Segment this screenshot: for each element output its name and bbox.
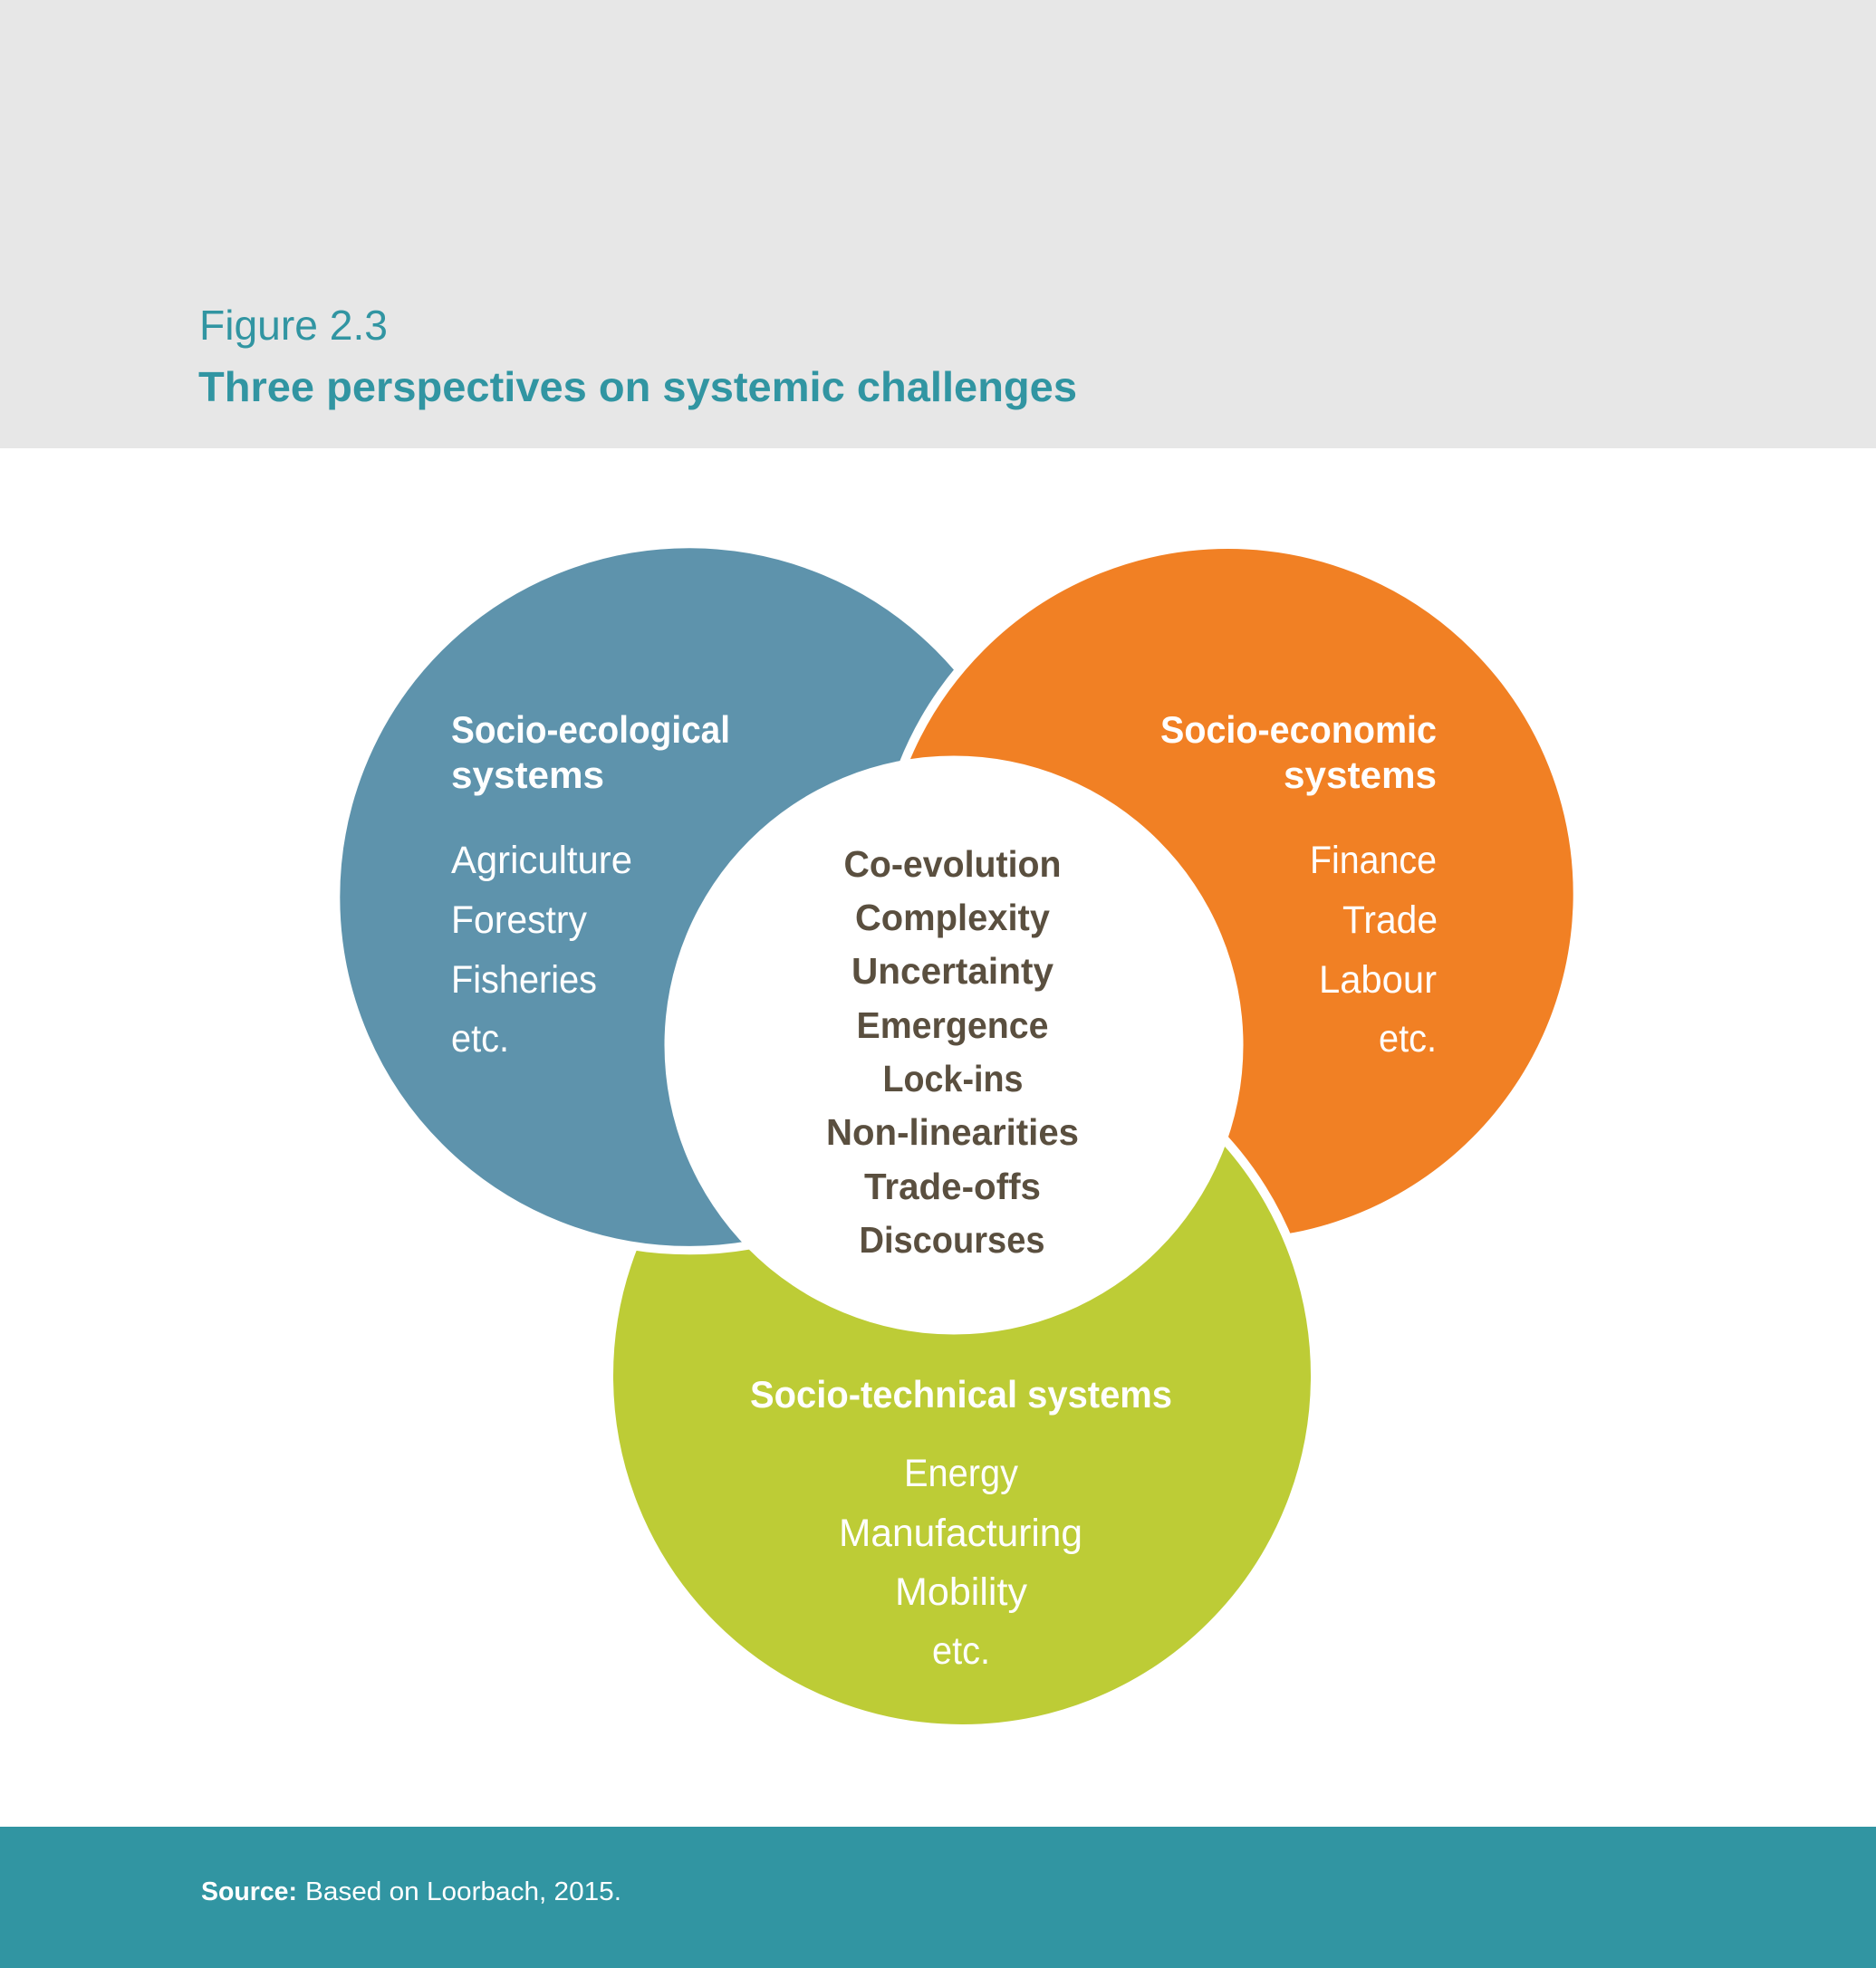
item: manufacturing: Manufacturing (839, 1512, 1082, 1555)
item: trade: Trade (1342, 898, 1438, 942)
item: agriculture: Agriculture (451, 839, 632, 882)
item: etc: etc. (451, 1017, 509, 1061)
source note: Source: (201, 1877, 297, 1906)
item: etc: etc. (932, 1629, 990, 1673)
header band (0, 0, 1876, 448)
item: co-evolution: Co-evolution (844, 843, 1062, 885)
item: uncertainty: Uncertainty (851, 950, 1053, 992)
heading: socio-economic: Socio-economic (1160, 708, 1437, 751)
item: emergence: Emergence (857, 1004, 1049, 1046)
item: discourses: Discourses (859, 1219, 1045, 1261)
text block: socio-economic systems (1160, 708, 1438, 1061)
item: non-linearities: Non-linearities (826, 1111, 1079, 1153)
item: complexity: Complexity (855, 897, 1050, 938)
text block: socio-ecological systems (451, 708, 730, 1061)
item: etc: etc. (1379, 1017, 1437, 1061)
item: forestry: Forestry (451, 898, 587, 942)
item: finance: Finance (1310, 839, 1437, 882)
text block: centre concepts (826, 843, 1079, 1261)
heading line: systems: systems (1284, 754, 1437, 796)
heading line: systems: systems (451, 754, 604, 796)
text block: socio-technical systems (750, 1373, 1172, 1673)
item: lock-ins: Lock-ins (882, 1058, 1024, 1099)
item: trade-offs: Trade-offs (864, 1166, 1041, 1207)
item: labour: Labour (1319, 958, 1437, 1002)
item: mobility: Mobility (895, 1570, 1027, 1614)
circle: socio-technical (609, 1022, 1315, 1729)
circle: socio-economic base (883, 549, 1573, 1239)
item: fisheries: Fisheries (451, 958, 597, 1002)
source note: Based on Loorbach, 2015. (305, 1877, 621, 1906)
circle: centre white (665, 755, 1243, 1335)
figure number: Figure 2.3 (199, 302, 388, 349)
heading: socio-ecological: Socio-ecological (451, 708, 730, 751)
circle: socio-economic overlap over socio-ecological (900, 549, 1573, 906)
footer band (0, 1827, 1876, 1968)
circle: socio-ecological (336, 544, 1043, 1251)
heading: socio-technical systems: Socio-technical systems (750, 1373, 1172, 1416)
item: energy: Energy (904, 1452, 1018, 1495)
title: Three perspectives on systemic challenges (198, 363, 1077, 410)
